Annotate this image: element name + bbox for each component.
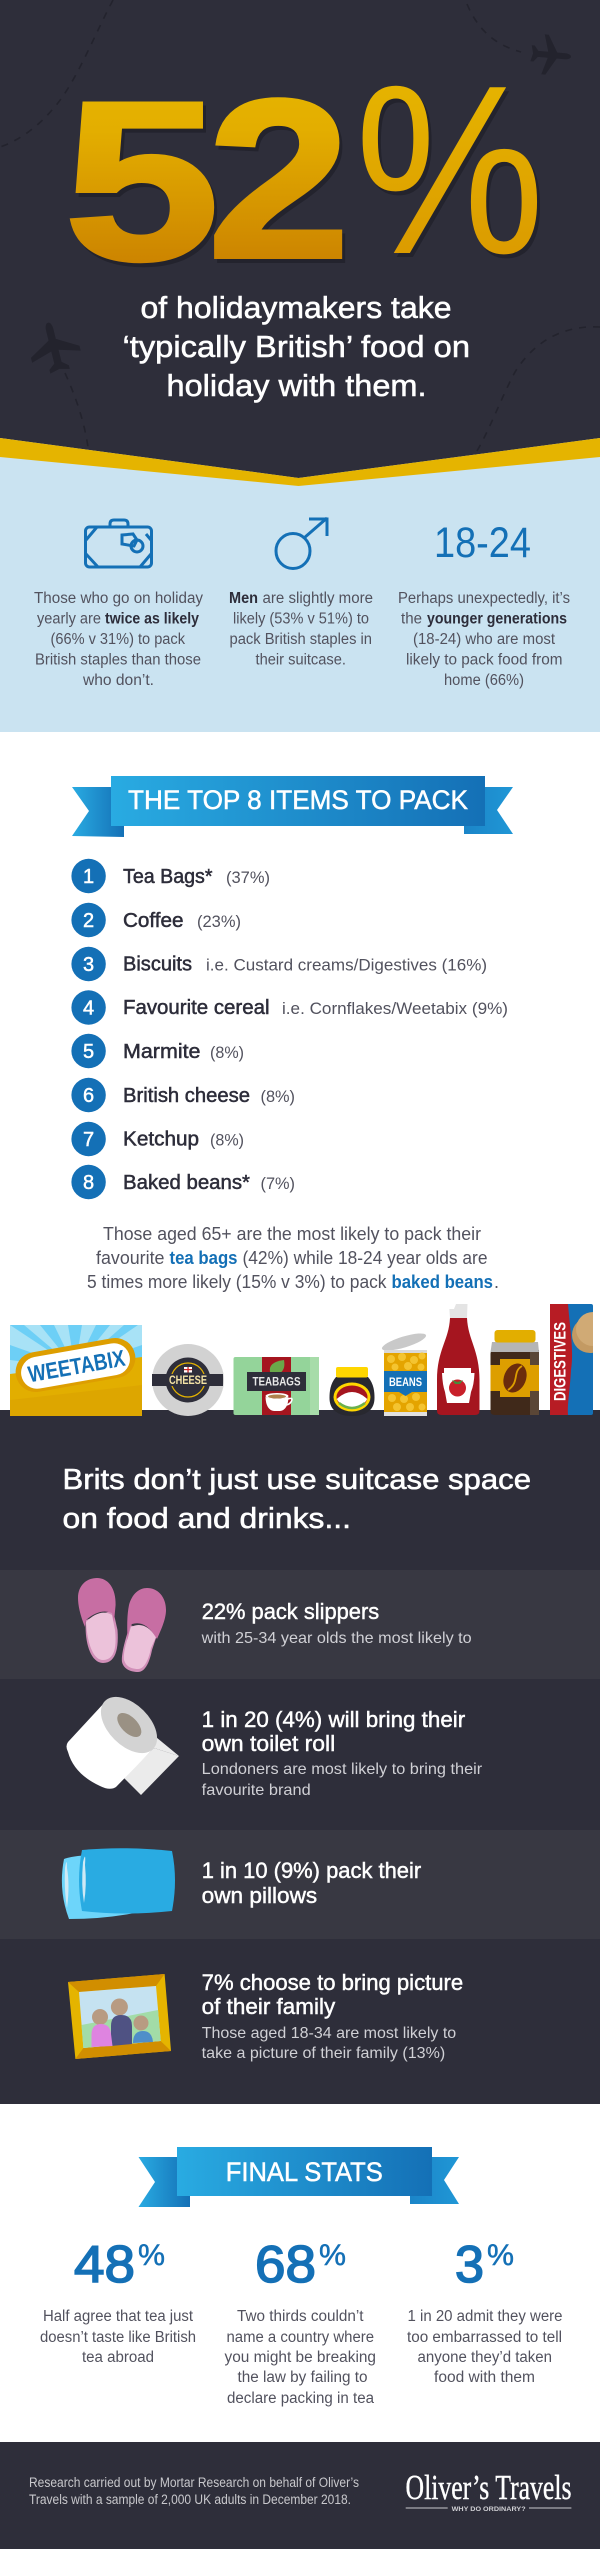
icon: toilet roll <box>66 1686 179 1795</box>
item 7 ketchup: 7 <box>83 1129 94 1151</box>
icon: baked beans can <box>380 1330 428 1416</box>
stat: 68%: Two thirds couldn’t <box>237 2308 364 2325</box>
stat: 68%: % <box>319 2239 346 2272</box>
text: frequent holidaymakers: British staples than those <box>35 652 201 668</box>
panel: dark section <box>0 1410 600 2104</box>
item 2 coffee <box>71 903 241 937</box>
icon: teabags box: TEABAGS <box>252 1376 301 1388</box>
item 7 ketchup: (8%) <box>210 1130 244 1150</box>
panel: footer <box>0 2442 600 2549</box>
stat: 3%: food with them <box>434 2369 535 2386</box>
heading banner: final stats <box>138 2147 459 2207</box>
stat: 68%: you might be breaking <box>224 2349 376 2366</box>
icon: weetabix box <box>10 1325 142 1416</box>
headline text: ‘typically British’ food on <box>122 329 470 364</box>
item 3 biscuits: i.e. Custard creams/Digestives (16%) <box>206 956 487 974</box>
item 8 baked beans: Baked beans* <box>123 1172 250 1194</box>
icon: weetabix box: WEETABIX <box>26 1345 128 1387</box>
item 5 marmite: 5 <box>83 1041 94 1063</box>
item 8 baked beans: (7%) <box>260 1174 295 1193</box>
text: research note <box>29 2475 359 2507</box>
headline text: holiday with them. <box>166 368 426 403</box>
big headline number <box>64 36 548 311</box>
text: frequent holidaymakers: (66% v 31%) to pack <box>50 631 185 648</box>
text: younger generations <box>398 590 570 689</box>
heading banner: final stats: FINAL STATS <box>226 2157 383 2187</box>
row: toilet roll: 1 in 20 (4%) will bring their <box>202 1707 465 1732</box>
row: pillows <box>0 1830 600 1939</box>
text: men: their suitcase. <box>256 652 346 668</box>
item 6 cheese: (8%) <box>260 1087 295 1106</box>
item 1 tea bags <box>71 859 270 893</box>
item 2 coffee: (23%) <box>197 912 241 931</box>
icon: plane top right <box>529 33 573 77</box>
stat: 48%: Half agree that tea just <box>43 2308 194 2325</box>
item 3 biscuits: 3 <box>83 954 94 976</box>
icon: digestives packet: DIGESTIVES <box>552 1322 570 1401</box>
headline text <box>122 290 470 403</box>
text: men: likely (53% v 51%) to <box>233 610 369 628</box>
row: slippers: with 25-34 year olds the most likely to <box>201 1630 472 1647</box>
icon: cheese: CHEESE <box>169 1375 207 1387</box>
item 2 coffee: Coffee <box>123 910 184 932</box>
stat: 68%: declare packing in tea <box>227 2390 374 2407</box>
item 6 cheese: 6 <box>83 1085 94 1107</box>
text: frequent holidaymakers: who don’t. <box>82 672 154 689</box>
item 7 ketchup: Ketchup <box>123 1128 199 1150</box>
item 3 biscuits: Biscuits <box>123 954 192 976</box>
item 8 baked beans: 8 <box>83 1172 94 1194</box>
flight path dashed lines <box>0 0 600 456</box>
text: age paragraph: (42%) while 18-24 year olds are <box>242 1248 488 1268</box>
text: age paragraph <box>87 1224 499 1292</box>
text: research note: Travels with a sample of 2,000 UK adults in December 2018. <box>29 2492 351 2507</box>
text: research note: Research carried out by Mortar Research on behalf of Oliver’s <box>29 2475 359 2490</box>
item 2 coffee: 2 <box>83 910 94 932</box>
stat: 48% <box>40 2236 196 2366</box>
decorative gold chevron band <box>0 438 600 486</box>
text: younger generations: Perhaps unexpectedly, it’s <box>398 590 570 607</box>
stat: 48%: tea abroad <box>82 2349 154 2366</box>
text: men: pack British staples in <box>230 631 372 648</box>
row: toilet roll: own toilet roll <box>202 1731 335 1756</box>
stat: 48%: % <box>138 2239 165 2272</box>
row: toilet roll: Londoners are most likely to bring their <box>202 1761 483 1778</box>
text: men: Men <box>229 590 258 607</box>
item 6 cheese <box>71 1078 295 1112</box>
logo: Oliver's Travels: WHY DO ORDINARY? <box>452 2506 526 2513</box>
heading banner: top 8 items <box>72 776 513 837</box>
big headline number: 5 <box>64 55 219 307</box>
row: family picture <box>68 1970 463 2062</box>
row: slippers <box>0 1570 600 1679</box>
item 1 tea bags: 1 <box>83 866 94 888</box>
icon: male symbol <box>276 518 327 568</box>
icon: coffee jar <box>490 1330 539 1415</box>
stat: 48%: doesn’t taste like British <box>40 2329 196 2346</box>
row: toilet roll <box>66 1686 483 1799</box>
text: younger generations: the <box>401 610 422 628</box>
food illustrations on shelf <box>10 1304 600 1416</box>
stat: 3%: 3 <box>455 2236 484 2294</box>
big headline number: % <box>355 36 545 305</box>
text: younger generations: likely to pack food from <box>406 652 562 668</box>
text: frequent holidaymakers: twice as likely <box>105 610 199 628</box>
text: age paragraph: 5 times more likely (15% v 3%) to pack <box>87 1272 387 1292</box>
text: frequent holidaymakers <box>34 590 203 689</box>
text: men <box>229 590 373 668</box>
text: age paragraph: baked beans <box>392 1272 493 1292</box>
item 5 marmite <box>71 1034 244 1068</box>
item 6 cheese: British cheese <box>123 1085 250 1107</box>
icon: marmite jar <box>330 1367 374 1416</box>
item 7 ketchup <box>71 1122 244 1156</box>
ranked list <box>71 859 508 1199</box>
row: pillows: 1 in 10 (9%) pack their <box>202 1858 421 1883</box>
heading: non-food items: Brits don’t just use suitcase space <box>62 1464 531 1496</box>
headline text: of holidaymakers take <box>140 290 452 325</box>
text: younger generations: home (66%) <box>444 672 524 689</box>
stat: 68% <box>224 2236 376 2407</box>
big headline number: % <box>358 40 548 309</box>
text: age paragraph: . <box>494 1272 499 1292</box>
stat: 3%: 1 in 20 admit they were <box>408 2308 562 2325</box>
item 4 cereal: 4 <box>83 998 94 1020</box>
item 1 tea bags: (37%) <box>226 868 270 887</box>
row: toilet roll: favourite brand <box>202 1782 311 1799</box>
row: family picture: of their family <box>202 1994 335 2019</box>
icon: cheese <box>152 1344 224 1416</box>
panel: holiday facts <box>34 518 570 689</box>
item 4 cereal: Favourite cereal <box>123 997 270 1019</box>
stat: 68%: 68 <box>255 2236 316 2294</box>
stat: 3%: too embarrassed to tell <box>407 2329 562 2346</box>
icon: plane left <box>24 317 84 377</box>
text: younger generations: younger generations <box>427 610 567 628</box>
row: pillows: own pillows <box>202 1883 317 1908</box>
icon: suitcase <box>86 520 152 567</box>
stat: 3% <box>407 2236 562 2386</box>
icon: picture frame <box>68 1974 171 2059</box>
text: age paragraph: Those aged 65+ are the most likely to pack their <box>103 1224 481 1244</box>
item 5 marmite: (8%) <box>210 1043 244 1062</box>
heading: non-food items <box>62 1464 531 1535</box>
icon: teabags box <box>234 1357 319 1415</box>
row: family picture: Those aged 18-34 are most likely to <box>202 2025 456 2042</box>
row: family picture: take a picture of their family (13%) <box>202 2045 445 2062</box>
item 5 marmite: Marmite <box>123 1041 200 1063</box>
icon: pillows <box>62 1848 175 1919</box>
text: frequent holidaymakers: Those who go on holiday <box>34 590 203 607</box>
stat: 68%: the law by failing to <box>238 2369 368 2386</box>
heading: non-food items: on food and drinks... <box>62 1503 351 1535</box>
panel: light blue stats background <box>0 440 600 732</box>
icon: digestives packet <box>550 1304 593 1415</box>
icon: slippers <box>78 1578 166 1672</box>
icon: baked beans can: BEANS <box>389 1377 422 1389</box>
big headline number: 2 <box>210 57 353 310</box>
stat: 3%: anyone they’d taken <box>418 2349 552 2366</box>
row: family picture: 7% choose to bring picture <box>202 1970 463 1995</box>
item 1 tea bags: Tea Bags* <box>123 866 213 888</box>
item 3 biscuits <box>71 947 487 981</box>
text: frequent holidaymakers: yearly are <box>37 610 101 628</box>
text: age paragraph: favourite <box>96 1248 164 1268</box>
stat: 68%: name a country where <box>226 2329 374 2346</box>
stat: 3%: % <box>487 2239 514 2272</box>
heading banner: top 8 items: THE TOP 8 ITEMS TO PACK <box>128 785 468 815</box>
text: men: are slightly more <box>262 590 373 607</box>
icon: ketchup bottle <box>437 1304 480 1415</box>
panel: dark header <box>0 0 600 478</box>
item 4 cereal <box>71 990 508 1025</box>
age range 18-24: 18-24 <box>434 519 531 567</box>
big headline number: 2 <box>208 53 350 306</box>
text: younger generations: (18-24) who are most <box>413 631 556 648</box>
item 4 cereal: i.e. Cornflakes/Weetabix (9%) <box>282 999 508 1018</box>
stat: 48%: 48 <box>74 2236 135 2294</box>
big headline number: 5 <box>67 59 222 311</box>
item 8 baked beans <box>71 1165 295 1199</box>
row: slippers: 22% pack slippers <box>202 1599 379 1624</box>
text: age paragraph: tea bags <box>170 1248 238 1268</box>
